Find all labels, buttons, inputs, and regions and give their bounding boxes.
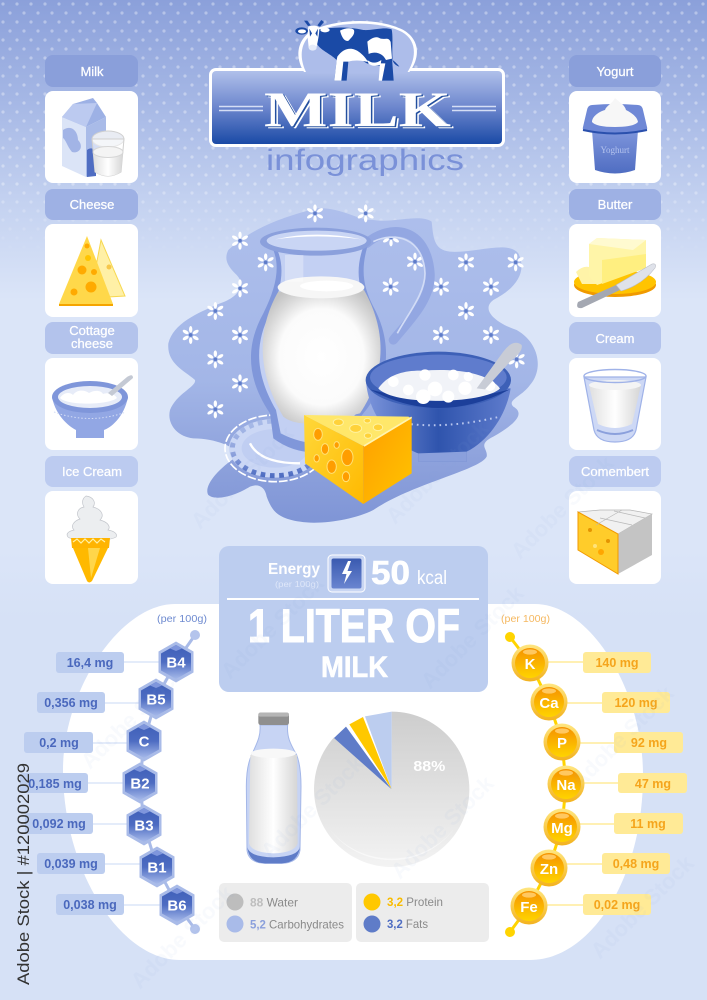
mineral Zn: Zn: [540, 861, 558, 878]
faint watermarks: [76, 415, 699, 994]
legend box protein and fats: 3,2 Protein: [387, 895, 443, 909]
energy label: (per 100g): [275, 579, 319, 589]
mineral K: K: [525, 656, 536, 673]
title shadow and text: MILK: [266, 82, 453, 138]
cheese wedge: [304, 415, 412, 504]
cottage cheese tab: Cottage: [69, 323, 115, 338]
ice cream tab: [45, 456, 138, 487]
vitamin C: [24, 720, 162, 762]
vitamin B3: [25, 804, 162, 846]
legend box water and carbohydrates: 88 Water: [250, 896, 298, 910]
title shadow and text: MILK: [267, 83, 454, 139]
mineral Zn: 0,48 mg: [613, 857, 659, 871]
vitamin C: 0,2 mg: [39, 736, 79, 750]
vitamin B6: [56, 884, 194, 926]
blob backdrop: [168, 208, 538, 523]
mineral P: P: [557, 735, 567, 752]
vitamin B6: B6: [167, 898, 187, 914]
vitamin C: C: [139, 734, 150, 750]
mineral Fe: 0,02 mg: [594, 898, 640, 912]
legend box protein and fats: [356, 883, 489, 942]
yogurt card: Yoghurt: [600, 145, 630, 155]
butter card: [569, 224, 661, 317]
energy value: [371, 554, 447, 591]
energy panel: [219, 546, 488, 692]
vitamin B5: B5: [146, 692, 166, 708]
pie chart: [314, 712, 469, 867]
doily: [225, 415, 325, 482]
panel title: 1 LITER OF: [248, 599, 460, 652]
mineral K: 140 mg: [595, 656, 639, 670]
mineral Na: 47 mg: [635, 777, 671, 791]
cream tab: [569, 322, 661, 354]
flower pattern: [182, 204, 525, 418]
faint watermarks: Adobe Stock: [586, 850, 699, 964]
mineral Ca: Ca: [539, 695, 559, 712]
mineral Mg: Mg: [551, 820, 573, 837]
pie label: 88%: [413, 759, 446, 775]
left column: dairy categories: [45, 55, 138, 584]
jug: [251, 228, 430, 452]
vitamin B5: 0,356 mg: [44, 696, 98, 710]
ice cream card: [45, 491, 138, 584]
bottle and pie chart: [246, 712, 469, 867]
mineral P: 92 mg: [631, 736, 667, 750]
cheese tab: Cheese: [70, 197, 114, 212]
faint watermarks: Adobe Stock: [256, 750, 369, 864]
logo: milk banner: [209, 20, 505, 147]
comembert tab: Comembert: [581, 464, 649, 479]
subtitle: infographics: [266, 144, 464, 177]
mineral Na: [548, 766, 687, 802]
banner side lines: [219, 106, 496, 110]
faint watermarks: Adobe Stock: [506, 450, 619, 564]
vitamin B5: [37, 678, 174, 720]
cheese card: [45, 224, 138, 317]
title shadow and text: MILK: [264, 81, 451, 137]
milk card: [45, 91, 138, 183]
bowl: [366, 343, 522, 462]
milk tab: Milk: [80, 64, 104, 79]
comembert tab: [569, 456, 661, 487]
mineral K: [512, 644, 651, 682]
stock id caption: Adobe Stock | #120002029: [14, 763, 33, 985]
legend box water and carbohydrates: 5,2 Carbohydrates: [250, 918, 344, 932]
legend box water and carbohydrates: [219, 883, 352, 942]
vitamin B1: 0,039 mg: [44, 857, 98, 871]
vitamins chain: [20, 614, 207, 934]
vitamin B3: B3: [134, 818, 154, 834]
milk bottle: [246, 713, 301, 863]
energy value: kcal: [417, 568, 447, 589]
minerals chain: [501, 614, 687, 937]
cow body: [295, 20, 399, 81]
mineral Mg: 11 mg: [630, 817, 666, 831]
white nutrition area: [63, 604, 643, 960]
minerals per 100g: (per 100g): [501, 614, 550, 625]
vitamin B2: B2: [130, 776, 150, 792]
energy label: Energy: [268, 561, 320, 578]
energy label: [268, 561, 320, 589]
legend: [219, 883, 489, 942]
comembert card: [569, 491, 661, 584]
vitamin B1: B1: [147, 860, 167, 876]
cottage cheese tab: [45, 322, 138, 354]
cottage cheese tab: cheese: [71, 336, 113, 351]
faint watermarks: Adobe Stock: [126, 880, 239, 994]
vitamin B4: [56, 642, 194, 682]
mineral Zn: [530, 850, 670, 886]
vitamin B4: B4: [166, 654, 186, 672]
faint watermarks: Adobe Stock: [216, 570, 329, 684]
vitamin B2: 0,185 mg: [28, 777, 82, 791]
mineral Ca: [530, 684, 670, 720]
mineral Na: Na: [556, 777, 576, 794]
vitamin B6: 0,038 mg: [63, 898, 117, 912]
banner plate: [209, 68, 505, 147]
cream tab: Cream: [595, 331, 635, 346]
cream card: [569, 358, 661, 450]
mineral P: [544, 724, 683, 760]
faint watermarks: Adobe Stock: [386, 770, 499, 884]
milk tab: [45, 55, 138, 87]
right column: dairy categories: [569, 55, 661, 584]
cottage cheese card: [45, 358, 138, 450]
energy value: 50: [371, 554, 410, 591]
cheese tab: [45, 189, 138, 220]
legend box protein and fats: 3,2 Fats: [387, 917, 428, 931]
mineral Ca: 120 mg: [614, 696, 658, 710]
yogurt tab: [569, 55, 661, 87]
faint watermarks: Adobe Stock: [186, 420, 299, 534]
ice cream tab: Ice Cream: [62, 464, 122, 479]
faint watermarks: Adobe Stock: [566, 680, 679, 794]
vitamin B4: 16,4 mg: [67, 656, 113, 670]
butter tab: [569, 189, 661, 220]
mineral Mg: [544, 808, 683, 846]
vitamin B2: [20, 762, 158, 804]
main illustration: jug, bowl, cheese: [168, 204, 538, 523]
faint watermarks: Adobe Stock: [416, 580, 529, 694]
mineral Fe: [510, 888, 651, 924]
icon: lightning: [328, 555, 365, 592]
butter tab: Butter: [598, 197, 633, 212]
background dot pattern: [2, 2, 704, 222]
faint watermarks: Adobe Stock: [76, 660, 189, 774]
vitamin B1: [37, 846, 174, 888]
yogurt tab: Yogurt: [596, 64, 634, 79]
cow badge: [295, 20, 417, 81]
mineral Fe: Fe: [520, 899, 538, 916]
faint watermarks: Adobe Stock: [381, 415, 494, 529]
yogurt card: [569, 91, 661, 183]
vitamin B3: 0,092 mg: [32, 817, 86, 831]
vitamins per 100g: (per 100g): [157, 614, 207, 625]
panel subtitle: MILK: [321, 651, 388, 684]
